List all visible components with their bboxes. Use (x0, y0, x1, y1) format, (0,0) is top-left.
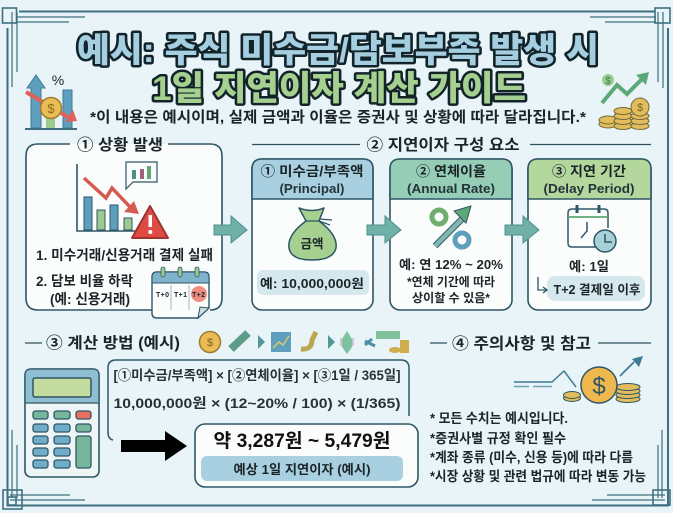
card header: principal (252, 159, 373, 199)
note 1: * 모든 수치는 예시입니다. (430, 411, 568, 426)
heading: notes: ④ 주의사항 및 참고 (452, 335, 591, 353)
icon: coins with rising line: $ (592, 373, 606, 400)
icon row: money flow: $ (207, 337, 213, 349)
icon: rising chart with coins: $ (637, 102, 643, 114)
note 4: *시장 상황 및 관련 법규에 따라 변동 가능 (430, 469, 646, 484)
text: cause 2: 2. 담보 비율 하락 (36, 273, 133, 289)
icon: calendar T+2 (152, 267, 209, 318)
note 2: *증권사별 규정 확인 필수 (430, 430, 566, 446)
icon: falling bar chart (77, 162, 157, 231)
formula: general: [①미수금/부족액] × [②연체이율] × [③1일 / 365일] (114, 368, 400, 383)
icon: falling chart with coin (25, 72, 77, 129)
icon: money bag (289, 208, 336, 260)
label: period: ③ 지연 기간 (552, 164, 627, 179)
example: rate: 예: 연 12% ~ 20% (399, 258, 503, 272)
icon: calendar with clock (568, 205, 616, 252)
icon: calculator (25, 369, 99, 477)
panel: situation (26, 136, 222, 318)
text: cause 1: 1. 미수거래/신용거래 결제 실패 (36, 247, 213, 263)
icon: calendar T+2: T+1 (174, 292, 187, 299)
card header: period (528, 159, 651, 199)
title line 1: 예시: 주식 미수금/담보부족 발생 시 (77, 32, 599, 70)
notes list (430, 411, 646, 484)
icon: rising chart with coins: $ (605, 76, 611, 87)
heading: situation: ① 상황 발생 (77, 136, 163, 154)
example pill: principal (257, 270, 369, 295)
icon: coins with rising line (514, 356, 643, 403)
label: rate english: (Annual Rate) (407, 181, 495, 196)
section: notes (430, 335, 651, 484)
example: period: 예: 1일 (569, 259, 609, 274)
icon: percent with arrow (432, 206, 471, 247)
panel fill (26, 144, 222, 310)
arrow: to components (214, 216, 247, 243)
formula box (108, 360, 409, 440)
result amount: 약 3,287원 ~ 5,479원 (214, 430, 390, 452)
text: cause 2 example: (예: 신용거래) (50, 291, 130, 307)
formula: example: 10,000,000원 × (12~20% / 100) × (1/365) (114, 395, 400, 411)
result box (195, 424, 418, 487)
panel outline (26, 144, 222, 310)
card: delay period (528, 159, 651, 310)
arrow: rate to period (505, 216, 539, 243)
card header: rate (390, 159, 512, 199)
heading: calculation method: ③ 계산 방법 (예시) (46, 334, 180, 352)
label: principal english: (Principal) (280, 181, 344, 196)
title (77, 32, 599, 108)
icon: money bag: 금액 (300, 237, 324, 251)
icon: falling chart with coin: $ (47, 101, 55, 116)
icon: elbow arrow (538, 277, 547, 293)
card: principal (252, 159, 373, 310)
subtitle note: *이 내용은 예시이며, 실제 금액과 이율은 증권사 및 상황에 따라 달라집니다.* (90, 109, 586, 126)
arrow: to result (121, 431, 187, 461)
icon: calendar T+2: T+0 (156, 292, 169, 299)
heading: components: ② 지연이자 구성 요소 (366, 136, 520, 154)
result pill (201, 456, 403, 481)
icon: warning triangle (132, 206, 168, 238)
percent sign: % (52, 72, 64, 88)
note: rate varies line 1: *연체 기간에 따라 (407, 274, 495, 289)
text: after settlement date: T+2 결제일 이후 (554, 282, 640, 297)
note 3: *계좌 종류 (미수, 신용 등)에 따라 다름 (430, 450, 633, 465)
label: principal: ① 미수금/부족액 (260, 164, 364, 179)
section: components (252, 136, 651, 310)
pill: after settlement date (547, 276, 645, 301)
icon: rising chart with coins (599, 72, 649, 130)
icon row: money flow (200, 331, 409, 354)
example: principal: 예: 10,000,000원 (260, 277, 364, 291)
icon: calendar T+2: T+2 (192, 292, 205, 299)
arrow: principal to rate (367, 216, 401, 243)
title line 2: 1일 지연이자 계산 가이드 (152, 70, 526, 108)
label: rate: ② 연체이율 (416, 164, 486, 179)
result caption: 예상 1일 지연이자 (예시) (234, 462, 370, 477)
label: period english: (Delay Period) (544, 181, 634, 196)
note: rate varies line 2: 상이할 수 있음* (412, 291, 490, 305)
section: calculation method (25, 331, 418, 487)
card: annual rate (390, 159, 512, 310)
